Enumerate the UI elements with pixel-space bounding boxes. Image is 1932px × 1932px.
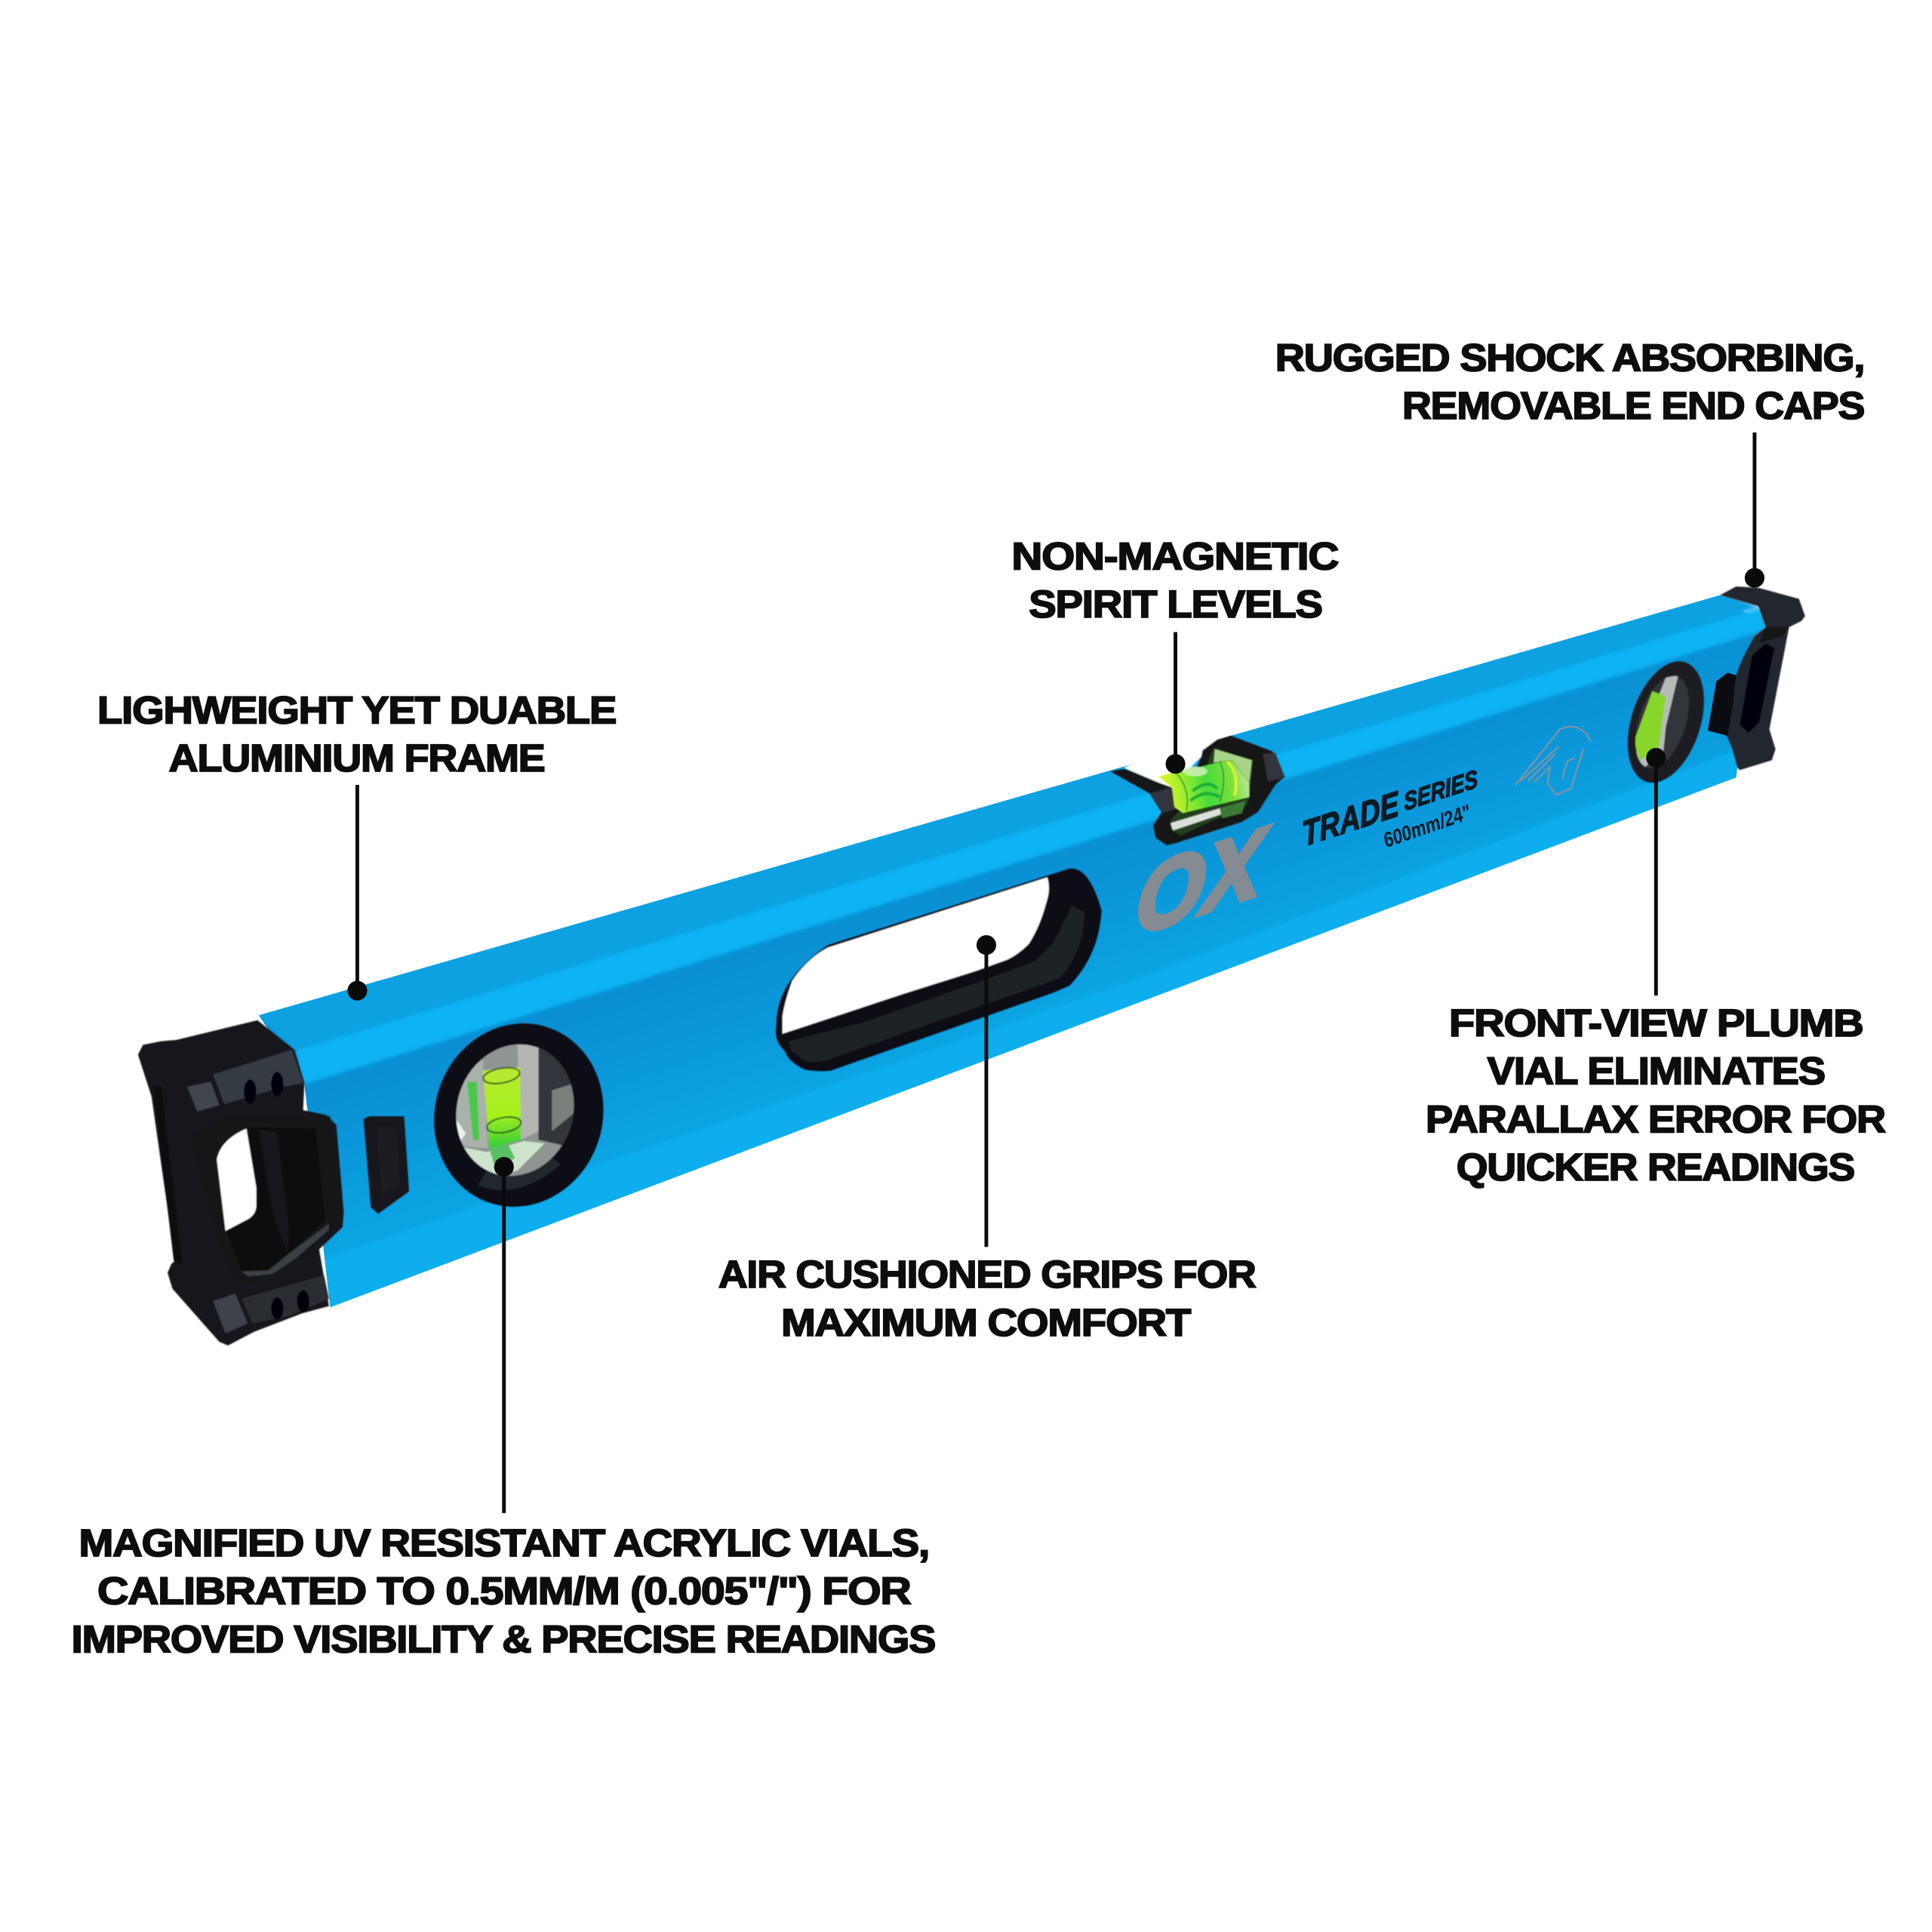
callout: end caps: RUGGED SHOCK ABSORBING, [1275,335,1864,379]
callout: end caps [1275,335,1864,588]
callout: plumb vial: VIAL ELIMINATES [1487,1049,1825,1093]
top bubble vial [1158,760,1250,814]
callout: spirit levels: NON-MAGNETIC [1011,534,1338,577]
left side tab [364,1116,409,1214]
callout: plumb vial: QUICKER READINGS [1457,1145,1854,1189]
callout: acrylic vials: MAGNIFIED UV RESISTANT ACRYLIC VIALS, [78,1521,929,1564]
callout: spirit levels [1011,534,1338,774]
callout: spirit levels: SPIRIT LEVELS [1029,582,1322,626]
left end cap [138,1020,344,1346]
aluminium frame body [253,589,1774,1318]
spirit level product: SERIES [1402,764,1479,816]
callout: acrylic vials: IMPROVED VISIBILITY & PRECISE READINGS [72,1617,935,1660]
callout: acrylic vials [72,1157,935,1660]
callout: plumb vial: PARALLAX ERROR FOR [1426,1097,1886,1140]
callout: grips: MAXIMUM COMFORT [781,1300,1191,1344]
grip slot [776,869,1102,1071]
callout: aluminium frame [97,688,616,1001]
callout: plumb vial: FRONT-VIEW PLUMB [1449,1001,1863,1044]
infographic: spirit level with feature callouts [73,343,1887,1654]
callout: aluminium frame: ALUMINIUM FRAME [169,736,545,780]
right end cap [1720,586,1805,770]
TRADE SERIES product name: TRADE [1300,783,1401,854]
callout: acrylic vials: CALIBRATED TO 0.5MM/M (0.005"/") FOR [97,1569,912,1613]
small right side tab [1708,672,1736,736]
callout: aluminium frame: LIGHWEIGHT YET DUABLE [97,688,616,731]
black frame of top bubble vial [1110,734,1285,845]
callout: grips [718,935,1257,1344]
callout: grips: AIR CUSHIONED GRIPS FOR [718,1252,1257,1296]
bull logo [1515,727,1591,795]
right plumb vial [1627,660,1705,783]
left plumb vial [433,1023,604,1208]
callout: end caps: REMOVABLE END CAPS [1402,383,1864,427]
size marking: 600mm/24" [1380,800,1475,852]
callout: plumb vial [1426,748,1886,1189]
spirit level product [138,586,1805,1346]
OX brand logo: OX [1131,805,1272,958]
